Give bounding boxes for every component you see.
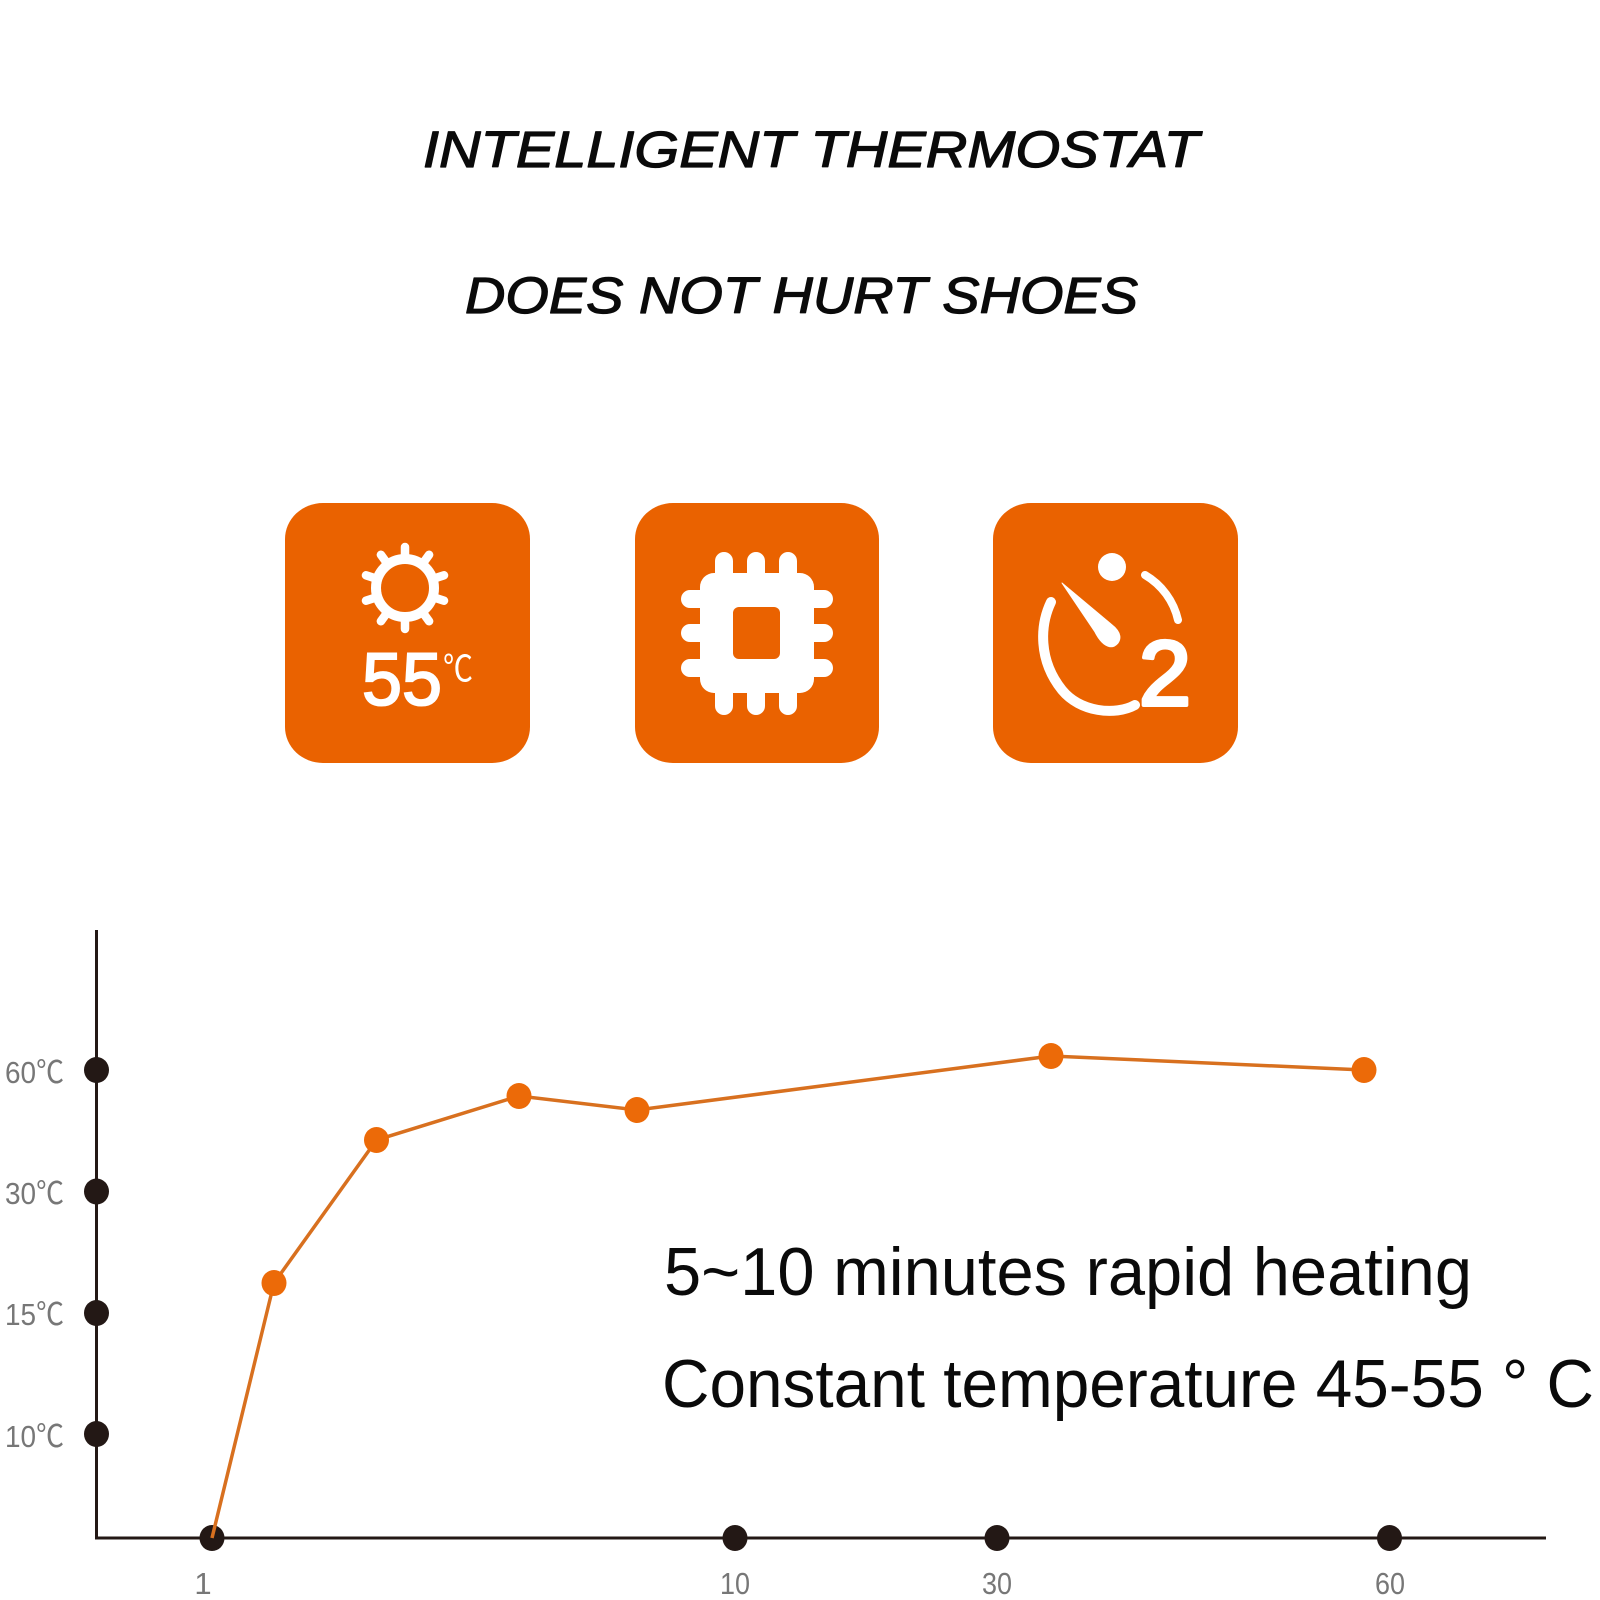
- chart axes: [96, 930, 1546, 1538]
- icon: timer dial: [1043, 553, 1191, 725]
- line chart: heating curve: [5, 930, 1546, 1600]
- y axis labels: 10℃: [5, 1419, 64, 1454]
- temperature line: [212, 1056, 1364, 1538]
- x axis labels: 60: [1375, 1566, 1405, 1600]
- icon: sun gear: [366, 547, 444, 629]
- x axis labels: 10: [720, 1566, 750, 1600]
- icon tile: chip: [635, 503, 879, 763]
- label: 55 degrees: 55: [362, 638, 442, 721]
- x axis tick markers: [200, 1525, 1402, 1551]
- x axis labels: 1: [194, 1566, 212, 1600]
- temperature data points: [262, 1043, 1376, 1296]
- y axis labels: [5, 1055, 64, 1454]
- heading: does not hurt shoes: DOES NOT HURT SHOES: [465, 267, 1138, 324]
- icon tile: 55 degree temperature: [285, 503, 530, 763]
- icon tile: 2 minute timer: [993, 503, 1238, 763]
- y axis labels: 60℃: [5, 1055, 64, 1090]
- callout: rapid heating: 5~10 minutes rapid heating: [664, 1234, 1472, 1310]
- y axis tick markers: [84, 1057, 109, 1447]
- x axis labels: 30: [982, 1566, 1012, 1600]
- y axis labels: 15℃: [5, 1297, 64, 1332]
- icon: timer dial: 2: [1139, 623, 1191, 725]
- heading: intelligent thermostat: INTELLIGENT THERMOSTAT: [423, 121, 1203, 178]
- callout: constant temperature: Constant temperature 45-55 ° C: [662, 1346, 1594, 1422]
- y axis labels: 30℃: [5, 1176, 64, 1211]
- x axis labels: [194, 1566, 1405, 1600]
- label: 55 degrees: ℃: [443, 648, 473, 689]
- icon: microchip: [690, 561, 824, 706]
